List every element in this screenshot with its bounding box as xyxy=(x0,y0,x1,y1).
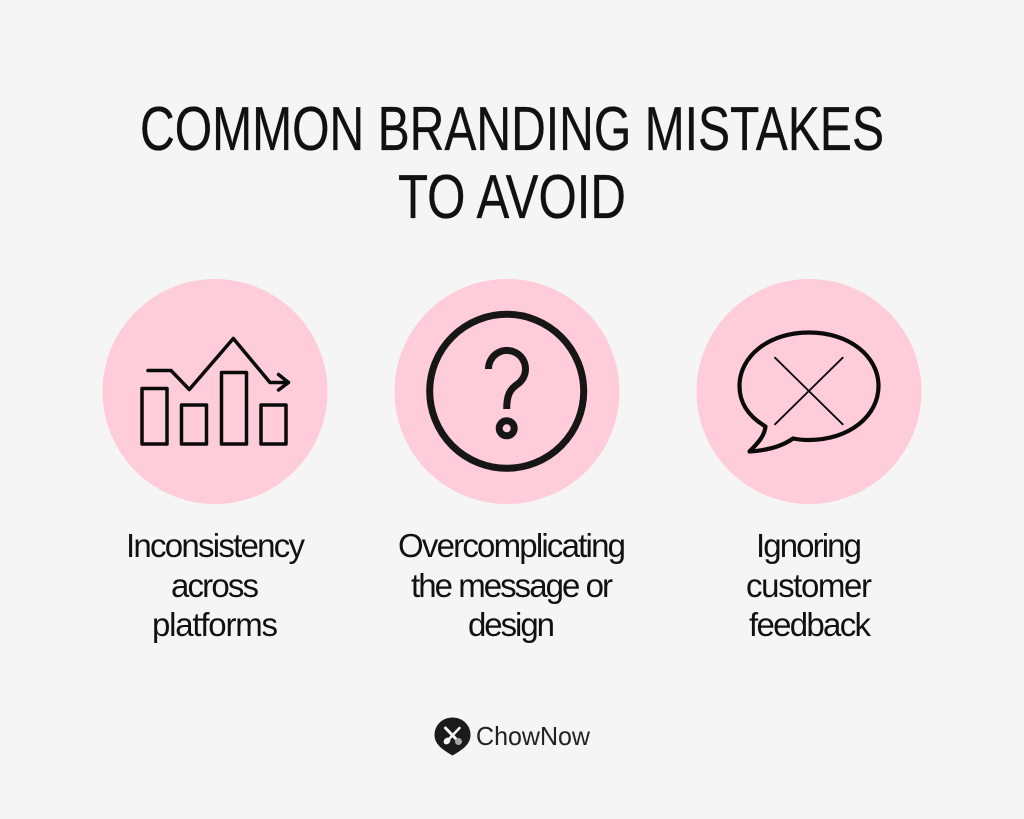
label: inconsistency across platforms: platforms xyxy=(152,606,278,643)
icon: question mark in circle xyxy=(394,279,620,504)
label: ignoring customer feedback xyxy=(746,527,872,643)
label: inconsistency across platforms: Inconsistency xyxy=(126,527,306,564)
panel: ignoring customer feedback xyxy=(696,279,922,643)
label: ignoring customer feedback: customer xyxy=(746,567,872,604)
panel: overcomplicating the message or design xyxy=(394,279,626,643)
label: overcomplicating the message or design: design xyxy=(468,606,555,643)
label: ignoring customer feedback: feedback xyxy=(749,606,872,643)
title: TO AVOID xyxy=(398,163,626,232)
wordmark: ChowNow xyxy=(476,721,590,751)
icon: speech bubble with cross xyxy=(696,279,922,504)
logo: ChowNow xyxy=(434,718,590,756)
panel: inconsistency across platforms xyxy=(102,279,328,643)
label: overcomplicating the message or design: Overcomplicating xyxy=(398,527,626,564)
label: inconsistency across platforms xyxy=(126,527,306,643)
label: overcomplicating the message or design xyxy=(398,527,626,643)
label: inconsistency across platforms: across xyxy=(171,567,259,604)
title xyxy=(140,95,884,232)
icon: bar chart with falling trend arrow xyxy=(102,279,328,504)
label: ignoring customer feedback: Ignoring xyxy=(756,527,862,564)
icon: pin with fork and spoon xyxy=(434,718,470,756)
label: overcomplicating the message or design: the message or xyxy=(411,567,613,604)
